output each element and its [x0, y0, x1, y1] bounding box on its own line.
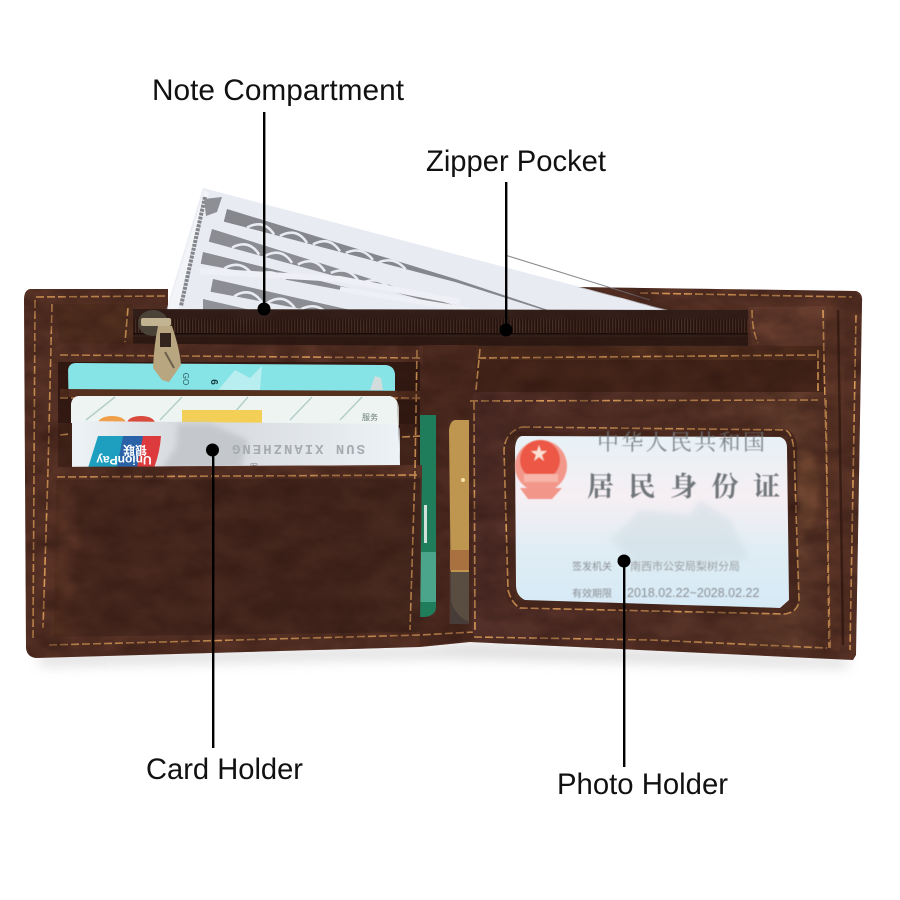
slot strip two — [58, 423, 72, 470]
id card text: 签发机关 — [572, 560, 612, 573]
back leather panel — [24, 287, 862, 660]
note row two — [206, 229, 619, 357]
note compartment banknotes — [166, 188, 668, 357]
upper left leather strip — [60, 343, 423, 364]
front pocket — [54, 350, 422, 637]
callout: photo holder — [557, 554, 728, 801]
id card text: 中华人民共和国 — [597, 430, 765, 455]
id card window — [515, 430, 789, 608]
id card text — [572, 430, 780, 600]
right panel id window — [470, 346, 830, 650]
unionpay logo: UnionPay — [96, 453, 152, 467]
green card — [420, 415, 436, 617]
leather grain overlay — [20, 285, 865, 663]
callout: note compartment — [152, 74, 405, 316]
zipper track — [133, 309, 748, 347]
center gutter — [420, 345, 478, 646]
cyan card: 6 — [208, 379, 219, 385]
callout: zipper pocket — [426, 145, 607, 336]
window frame — [504, 430, 798, 614]
card slots left — [43, 304, 474, 645]
inner top strip — [54, 304, 133, 345]
slot strip one — [60, 389, 420, 400]
unionpay logo — [88, 436, 161, 468]
id card text: 2018.02.22~2028.02.22 — [627, 586, 759, 600]
white stripe card: 服务 — [362, 412, 378, 422]
callout: note compartment: Note Compartment — [152, 74, 405, 107]
id pocket panel — [472, 392, 830, 650]
note row three — [201, 252, 390, 300]
front grey card: SUN XIANZHENG — [232, 440, 365, 456]
callout: zipper pocket: Zipper Pocket — [426, 145, 607, 178]
unionpay logo: 银联 — [123, 443, 147, 458]
cyan card: GO — [181, 373, 190, 385]
note row one — [221, 209, 634, 337]
upper right slot — [476, 346, 824, 392]
cyan card — [68, 363, 395, 392]
left outer band — [43, 304, 52, 628]
inner right outer band — [826, 306, 846, 652]
gold card — [449, 420, 469, 622]
callout: card holder — [146, 444, 303, 786]
wallet shadow — [40, 642, 850, 668]
id card text: 南西市公安局梨树分局 — [630, 559, 740, 573]
callout: card holder: Card Holder — [146, 753, 303, 786]
id card text: 居民身份证 — [587, 472, 780, 502]
front grey card: 图 — [250, 463, 258, 472]
id card text: 有效期限 — [572, 587, 612, 600]
white stripe card — [71, 396, 399, 430]
front grey card — [71, 421, 400, 472]
national emblem — [515, 440, 567, 499]
callout: photo holder: Photo Holder — [557, 768, 728, 801]
wallet body — [33, 293, 856, 652]
zipper pull — [138, 310, 181, 382]
note row four — [211, 279, 468, 341]
back edge stitching — [33, 293, 856, 650]
